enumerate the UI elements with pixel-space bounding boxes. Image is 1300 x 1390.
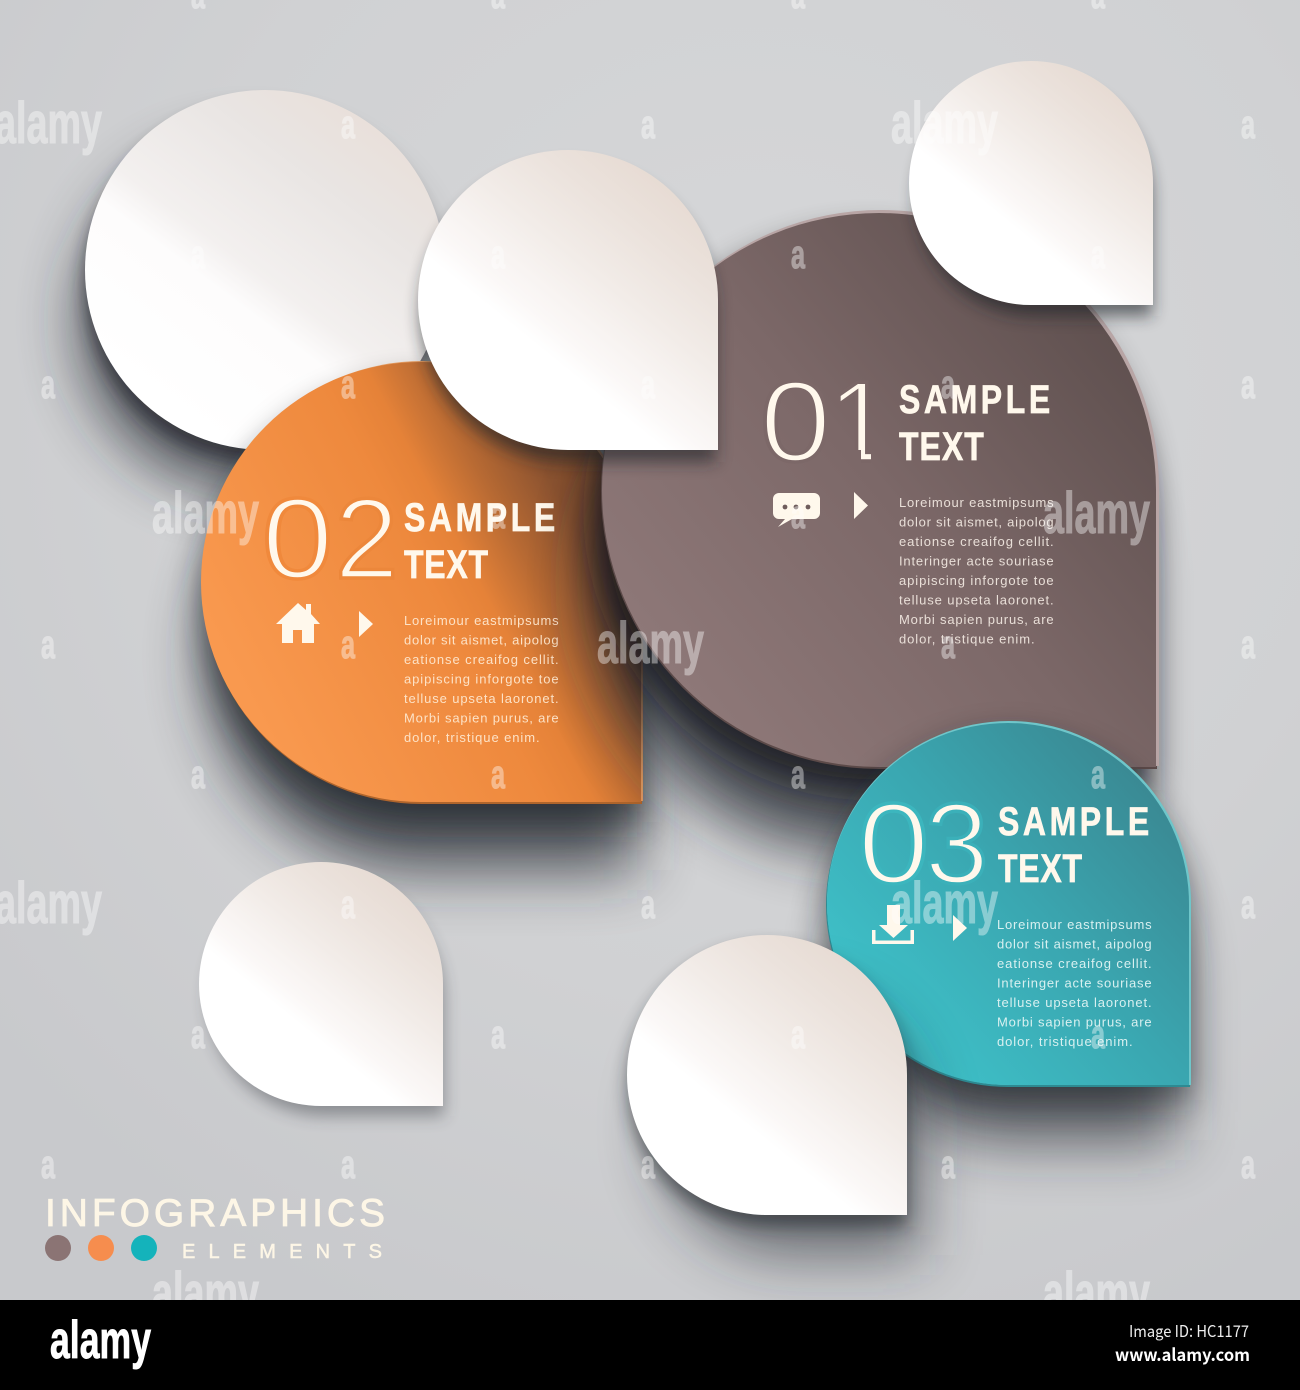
text block: teal body [997, 917, 1152, 1049]
text block: teal body: dolor sit aismet, aipolog [997, 936, 1152, 952]
text block: brown body: dolor sit aismet, aipolog [899, 514, 1054, 530]
watermarks: a [941, 623, 955, 667]
text block: teal body: telluse upseta laoronet. [997, 995, 1152, 1010]
text block: orange body: dolor sit aismet, aipolog [404, 632, 559, 648]
heading: sample text 02: SAMPLE [404, 495, 555, 540]
panel: large white circle [80, 90, 445, 490]
panel: brown step 01 [592, 210, 1159, 850]
watermarks: a [1091, 753, 1105, 797]
watermarks: a [641, 1143, 655, 1187]
watermarks: a [491, 1013, 505, 1057]
panel: white teardrop centre [418, 150, 718, 462]
text block: teal body: Interinger acte souriase [997, 976, 1152, 990]
watermarks: a [1091, 1013, 1105, 1057]
watermarks: alamy [891, 91, 998, 156]
text block: brown body: eationse creaifog cellit. [899, 534, 1054, 549]
panel: teal step 03 [826, 721, 1191, 1140]
text block: orange body: eationse creaifog cellit. [404, 652, 559, 667]
watermarks: a [941, 1143, 955, 1187]
text block: teal body: Loreimour eastmipsums [997, 917, 1152, 932]
panel: orange step 02 [201, 361, 643, 870]
number 01: 0 [760, 357, 831, 485]
watermarks: alamy [891, 871, 998, 936]
text block: teal body: dolor, tristique enim. [997, 1034, 1133, 1049]
watermarks: a [41, 1143, 55, 1187]
watermarks: a [1241, 103, 1255, 147]
watermarks: a [1091, 233, 1105, 277]
subtitle: elements: ELEMENTS [182, 1241, 382, 1263]
number 02: 0 [262, 474, 333, 602]
website: www.alamy.com [1115, 1341, 1250, 1366]
watermarks: a [791, 493, 805, 537]
watermarks: a [341, 1143, 355, 1187]
watermarks: a [41, 363, 55, 407]
watermarks: a [1241, 1143, 1255, 1187]
heading: sample text 02: TEXT [404, 542, 488, 587]
text block: brown body: Interinger acte souriase [899, 554, 1054, 568]
watermarks: a [791, 233, 805, 277]
watermarks: alamy [152, 1261, 259, 1326]
watermarks: alamy [152, 481, 259, 546]
text block: teal body: Morbi sapien purus, are [997, 1014, 1152, 1030]
text block: orange body: apipiscing inforgote toe [404, 672, 559, 686]
number 01: 1 [828, 359, 891, 486]
watermarks: a [191, 233, 205, 277]
watermarks: a [1241, 883, 1255, 927]
watermarks: alamy [597, 611, 704, 676]
heading: sample text 02 [404, 495, 555, 587]
watermarks: a [491, 753, 505, 797]
icon: download [872, 905, 914, 944]
watermarks: a [941, 363, 955, 407]
panel: white teardrop lower centre [627, 935, 920, 1255]
text block: brown body: dolor, tristique enim. [899, 632, 1035, 646]
text block: brown body: Loreimour eastmipsums [899, 495, 1054, 510]
arrow: brown triangle [854, 492, 868, 519]
icon: speech bubble [773, 493, 820, 527]
arrow: teal triangle [953, 915, 967, 941]
watermarks: a [191, 753, 205, 797]
watermarks: a [341, 883, 355, 927]
watermarks: a [491, 233, 505, 277]
panel: white teardrop top right [909, 61, 1153, 316]
text block: brown body [899, 495, 1054, 646]
watermarks: alamy [1043, 1261, 1150, 1326]
watermarks: a [641, 883, 655, 927]
heading: sample text 01: SAMPLE [899, 377, 1050, 422]
watermarks: a [491, 493, 505, 537]
heading: sample text 03: TEXT [998, 846, 1082, 891]
text block: brown body: Morbi sapien purus, are [899, 612, 1054, 627]
footer bar [0, 1300, 1300, 1390]
legend dots [45, 1235, 157, 1261]
watermarks: a [791, 1013, 805, 1057]
icon: house [276, 603, 320, 643]
number 01 [766, 382, 871, 460]
watermarks: a [1241, 623, 1255, 667]
watermarks: a [341, 623, 355, 667]
watermarks: alamy [1043, 481, 1150, 546]
number 03: 3 [925, 781, 988, 908]
arrow: orange triangle [359, 611, 373, 637]
number 02: 2 [335, 476, 398, 603]
heading: sample text 01 [899, 377, 1050, 469]
watermarks: a [341, 363, 355, 407]
watermarks: a [341, 103, 355, 147]
heading: sample text 03: SAMPLE [998, 799, 1149, 844]
heading: sample text 01: TEXT [899, 424, 984, 469]
text block: orange body: telluse upseta laoronet. [404, 691, 559, 706]
text block: orange body: Morbi sapien purus, are [404, 710, 559, 726]
text block: orange body: dolor, tristique enim. [404, 730, 540, 745]
watermarks: a [1241, 363, 1255, 407]
title: infographics: INFOGRAPHICS [45, 1192, 385, 1235]
image id: Image ID: HC1177 [1129, 1318, 1249, 1342]
watermarks: a [641, 363, 655, 407]
text block: orange body: Loreimour eastmipsums [404, 613, 559, 628]
watermarks: a [791, 753, 805, 797]
text block: teal body: eationse creaifog cellit. [997, 956, 1152, 971]
number 03 [858, 779, 988, 908]
panel: white teardrop lower left [199, 862, 444, 1116]
text block: brown body: telluse upseta laoronet. [899, 592, 1054, 608]
text block: orange body [404, 613, 559, 745]
watermarks: a [191, 1013, 205, 1057]
heading: sample text 03 [998, 799, 1149, 891]
number 02 [262, 474, 398, 603]
text block: brown body: apipiscing inforgote toe [899, 573, 1054, 588]
watermarks: a [641, 103, 655, 147]
number 03: 0 [858, 779, 929, 907]
watermarks: a [41, 623, 55, 667]
footer logo: alamy [50, 1311, 151, 1370]
